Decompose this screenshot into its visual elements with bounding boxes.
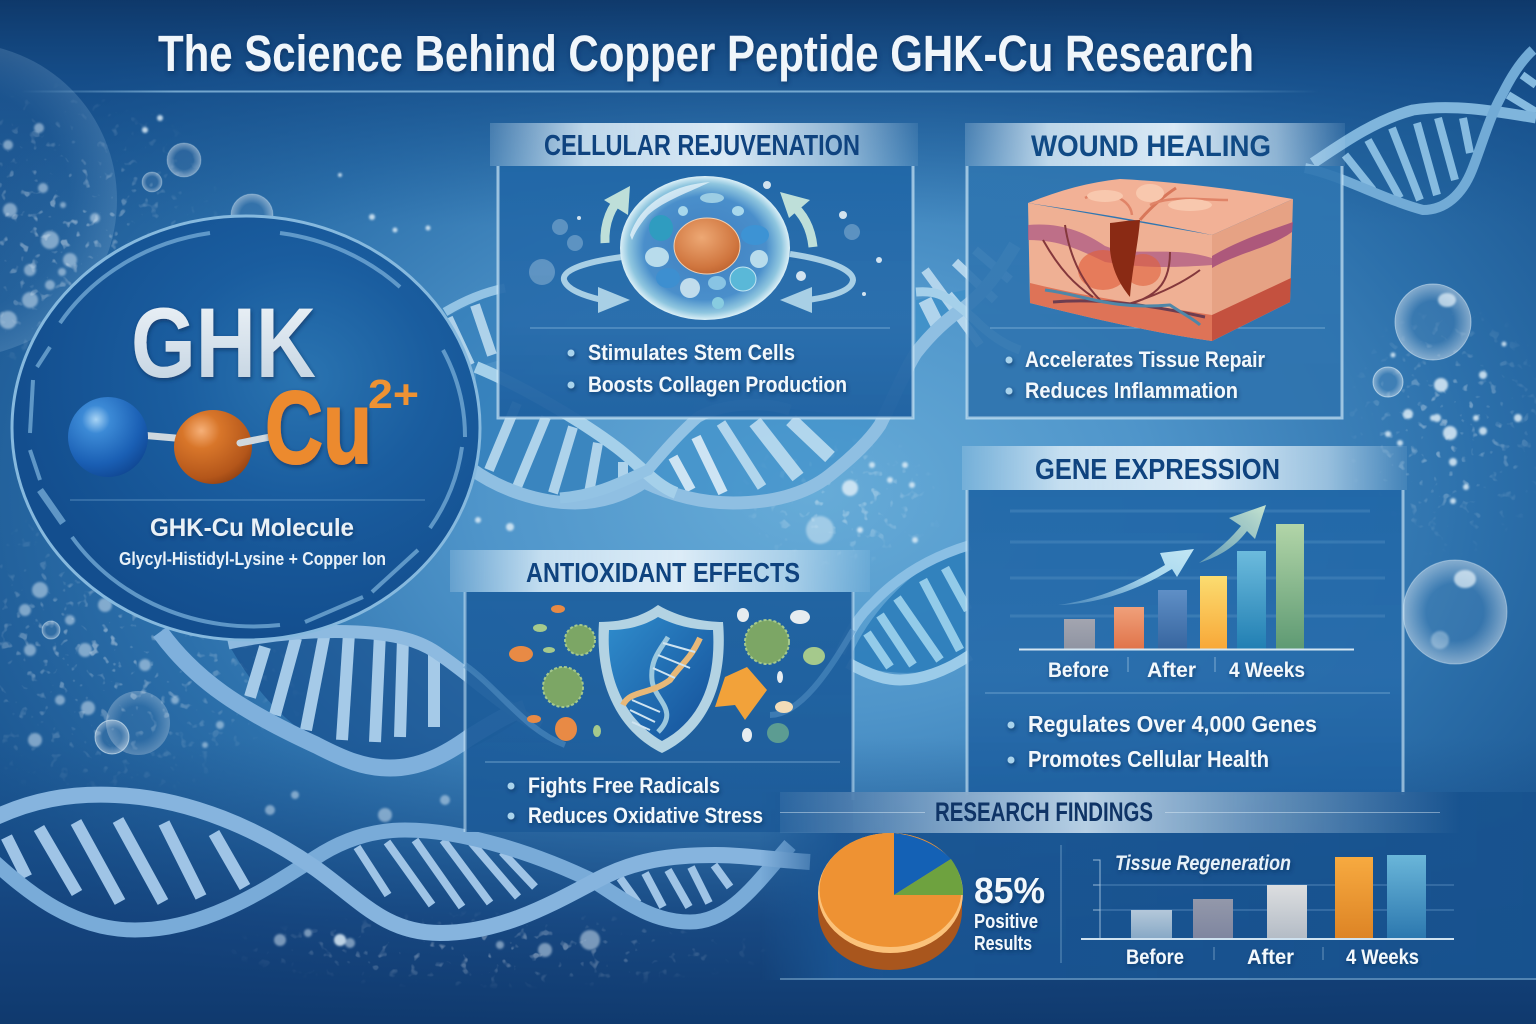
- header band: [962, 446, 1407, 490]
- heading: CELLULAR REJUVENATION: [544, 130, 860, 162]
- stat: 85% positive results: 85%: [974, 870, 1045, 911]
- DNA helix: right middle: [840, 545, 970, 680]
- stat: 85% positive results: Results: [974, 933, 1032, 955]
- bullets: Reduces Oxidative Stress: [528, 803, 763, 828]
- bullets: Accelerates Tissue Repair: [1025, 347, 1265, 372]
- centre helix strands: [470, 245, 1015, 503]
- icon: shield with radicals: [465, 605, 853, 753]
- bottom helix rungs: [6, 820, 245, 902]
- DNA helix: centre: [444, 245, 1020, 503]
- bar chart: tissue regeneration: 4 Weeks: [1346, 946, 1419, 969]
- top right rungs: [1345, 75, 1536, 200]
- DNA helix: bottom: [0, 795, 810, 933]
- right middle rungs: [867, 568, 968, 667]
- heading: Cu 2+: 2+: [368, 371, 419, 417]
- lower left strands: [160, 632, 525, 768]
- panel: research findings: [760, 792, 1536, 980]
- title: The Science Behind Copper Peptide GHK-Cu Research: [158, 25, 1254, 82]
- heading: GENE EXPRESSION: [1035, 454, 1280, 486]
- chart labels: Before: [1048, 659, 1109, 682]
- top right lobe: [1313, 108, 1490, 210]
- bullets: Boosts Collagen Production: [588, 372, 847, 397]
- icon: skin cross-section: [1028, 179, 1293, 341]
- chart labels: After: [1147, 659, 1196, 682]
- panel body: [498, 166, 913, 418]
- bullets: [1006, 347, 1265, 403]
- bar chart: tissue regeneration: After: [1247, 946, 1294, 969]
- bullets: [568, 340, 847, 397]
- panel: gene expression: [962, 446, 1407, 795]
- dashed orbit ring: [30, 233, 465, 626]
- panel: wound healing: [965, 123, 1345, 418]
- DNA helix: top right: [1305, 50, 1536, 210]
- header band: [450, 550, 870, 592]
- stat: 85% positive results: [974, 870, 1045, 955]
- molecule name: GHK-Cu Molecule: [150, 514, 354, 542]
- bullets: Fights Free Radicals: [528, 773, 720, 798]
- pie chart: [818, 833, 963, 970]
- heading: Cu 2+: Cu: [265, 370, 372, 485]
- large faint background sphere: [0, 43, 117, 357]
- decorative bubbles: [42, 143, 1507, 755]
- right middle strands: [840, 545, 970, 653]
- bar chart: tissue regeneration: [1081, 852, 1454, 969]
- panel body: [967, 490, 1403, 795]
- heading: WOUND HEALING: [1031, 130, 1271, 163]
- header band: [965, 123, 1345, 166]
- DNA helix: lower left middle: [160, 632, 540, 768]
- heading: GHK: GHK: [131, 287, 316, 398]
- bullets: Regulates Over 4,000 Genes: [1028, 711, 1317, 737]
- faint helix inside panel: [465, 630, 853, 745]
- bullets: Stimulates Stem Cells: [588, 340, 795, 365]
- chart labels: [1048, 659, 1305, 682]
- panel body: [465, 592, 853, 832]
- lower left lobe: [228, 632, 525, 768]
- header band: [490, 123, 918, 166]
- panel: GHK-Cu molecule: [12, 216, 480, 640]
- molecule description: Glycyl-Histidyl-Lysine + Copper Ion: [119, 548, 386, 569]
- bullets: [1008, 711, 1317, 772]
- top right strands: [1313, 108, 1536, 163]
- lower left rungs: [250, 633, 434, 742]
- panel body: [967, 166, 1342, 418]
- centre helix lobes: [476, 367, 644, 497]
- header band: [780, 792, 1460, 833]
- chart labels: 4 Weeks: [1229, 659, 1305, 682]
- trend arrows: [1058, 549, 1194, 605]
- bar chart: tissue regeneration: Tissue Regeneration: [1115, 852, 1291, 875]
- panel background: [760, 792, 1536, 980]
- heading: ANTIOXIDANT EFFECTS: [526, 557, 800, 588]
- panel: antioxidant effects: [450, 550, 870, 832]
- bottom helix strands: [0, 830, 790, 930]
- bullets: Promotes Cellular Health: [1028, 746, 1269, 772]
- centre helix rungs: [448, 250, 1010, 493]
- bullets: [508, 773, 763, 828]
- bar chart: tissue regeneration: Before: [1126, 946, 1184, 969]
- icon: molecule chain: [68, 397, 270, 484]
- stat: 85% positive results: Positive: [974, 911, 1038, 933]
- icon: stem cell with arrows: [529, 176, 882, 320]
- heading: RESEARCH FINDINGS: [935, 797, 1153, 827]
- molecule disc: [12, 216, 480, 640]
- bullets: Reduces Inflammation: [1025, 378, 1238, 403]
- panel: cellular rejuvenation: [490, 123, 918, 418]
- right middle lobe: [850, 545, 967, 673]
- bar chart: [1010, 505, 1385, 682]
